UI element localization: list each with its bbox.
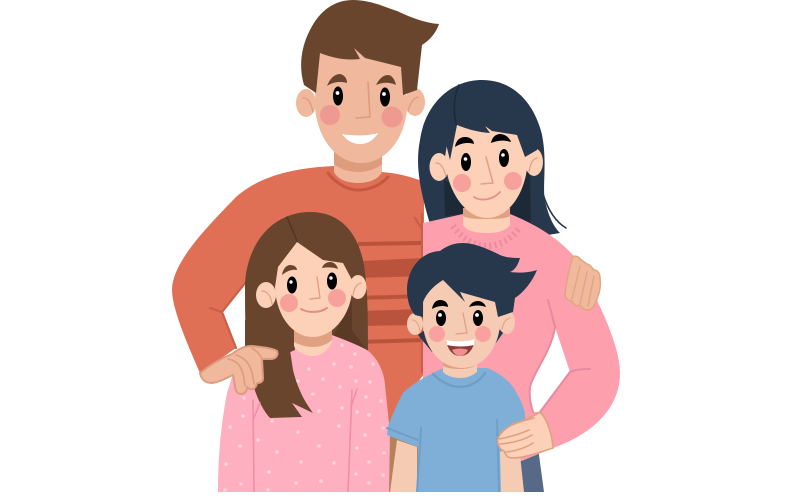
mother smile bbox=[474, 192, 500, 200]
neck shadow bbox=[294, 330, 332, 347]
father ears bbox=[296, 88, 425, 117]
sweater collar bbox=[328, 173, 388, 190]
sweater fold lines bbox=[530, 300, 590, 412]
neck shadow bbox=[463, 208, 510, 219]
mother face bbox=[445, 125, 528, 218]
mother fringe bbox=[446, 125, 542, 160]
daughter hair back bbox=[245, 212, 368, 352]
neck shadow bbox=[443, 360, 477, 369]
daughter cheeks bbox=[280, 289, 346, 312]
father smile bbox=[342, 133, 378, 144]
daughter eyebrows bbox=[282, 262, 338, 275]
mother trousers bbox=[520, 454, 544, 492]
daughter nose bbox=[310, 277, 320, 299]
neck shadow bbox=[334, 150, 382, 172]
father eyes bbox=[333, 86, 390, 106]
mother eyebrows bbox=[455, 134, 511, 147]
father sweater bbox=[172, 166, 424, 420]
hair shadow bbox=[333, 300, 368, 352]
mother ears bbox=[430, 148, 543, 181]
figure: mother bbox=[418, 80, 620, 492]
father neck bbox=[334, 164, 382, 183]
sweater stripes bbox=[358, 241, 423, 344]
father nose bbox=[356, 82, 370, 118]
hair inner shadow bbox=[444, 170, 531, 224]
t-shirt seams bbox=[387, 420, 499, 492]
daughter top bbox=[218, 335, 390, 492]
sweater seams bbox=[210, 214, 422, 372]
daughter neck bbox=[294, 330, 332, 356]
hair parting line bbox=[287, 217, 297, 241]
mother hand on son's shoulder bbox=[498, 412, 553, 458]
mother sweater bbox=[423, 214, 620, 470]
father cheeks bbox=[320, 105, 402, 128]
daughter smile bbox=[301, 308, 327, 312]
hair strand bbox=[543, 194, 566, 228]
family illustration bbox=[172, 0, 620, 492]
mother hair back bbox=[418, 80, 560, 238]
daughter face bbox=[275, 242, 352, 337]
mother neck bbox=[463, 216, 510, 233]
mother eyes bbox=[461, 149, 509, 171]
father hand on daughter's shoulder bbox=[200, 346, 278, 394]
mother nose bbox=[481, 157, 493, 184]
sleeve fold lines bbox=[253, 389, 357, 492]
son hair bbox=[407, 243, 537, 317]
figure: son bbox=[387, 243, 537, 492]
figure: daughter bbox=[200, 212, 390, 492]
father eyebrows bbox=[327, 74, 396, 86]
family group bbox=[172, 0, 620, 492]
son eyes bbox=[436, 310, 483, 326]
polka dots bbox=[223, 343, 386, 492]
daughter eyes bbox=[287, 272, 337, 294]
son arms bbox=[390, 440, 524, 492]
son nose bbox=[456, 313, 467, 334]
hair behind neck bbox=[418, 328, 503, 352]
son eyebrows bbox=[432, 300, 486, 309]
t-shirt collar bbox=[433, 373, 485, 387]
daughter ears bbox=[256, 275, 366, 308]
hair parting line bbox=[454, 85, 459, 124]
son open mouth bbox=[446, 339, 475, 356]
son face bbox=[423, 280, 500, 368]
father hand on shoulder bbox=[565, 256, 600, 310]
son t-shirt bbox=[387, 368, 525, 492]
son ears bbox=[407, 310, 515, 335]
ribbed collar bbox=[453, 226, 519, 246]
father face bbox=[315, 45, 407, 163]
hair front lock bbox=[245, 320, 313, 418]
son cheeks bbox=[429, 326, 491, 342]
mother cheeks bbox=[453, 172, 522, 192]
son neck bbox=[443, 360, 477, 378]
father trousers bbox=[388, 417, 418, 492]
figure: father bbox=[172, 0, 439, 492]
father hair bbox=[301, 0, 439, 95]
